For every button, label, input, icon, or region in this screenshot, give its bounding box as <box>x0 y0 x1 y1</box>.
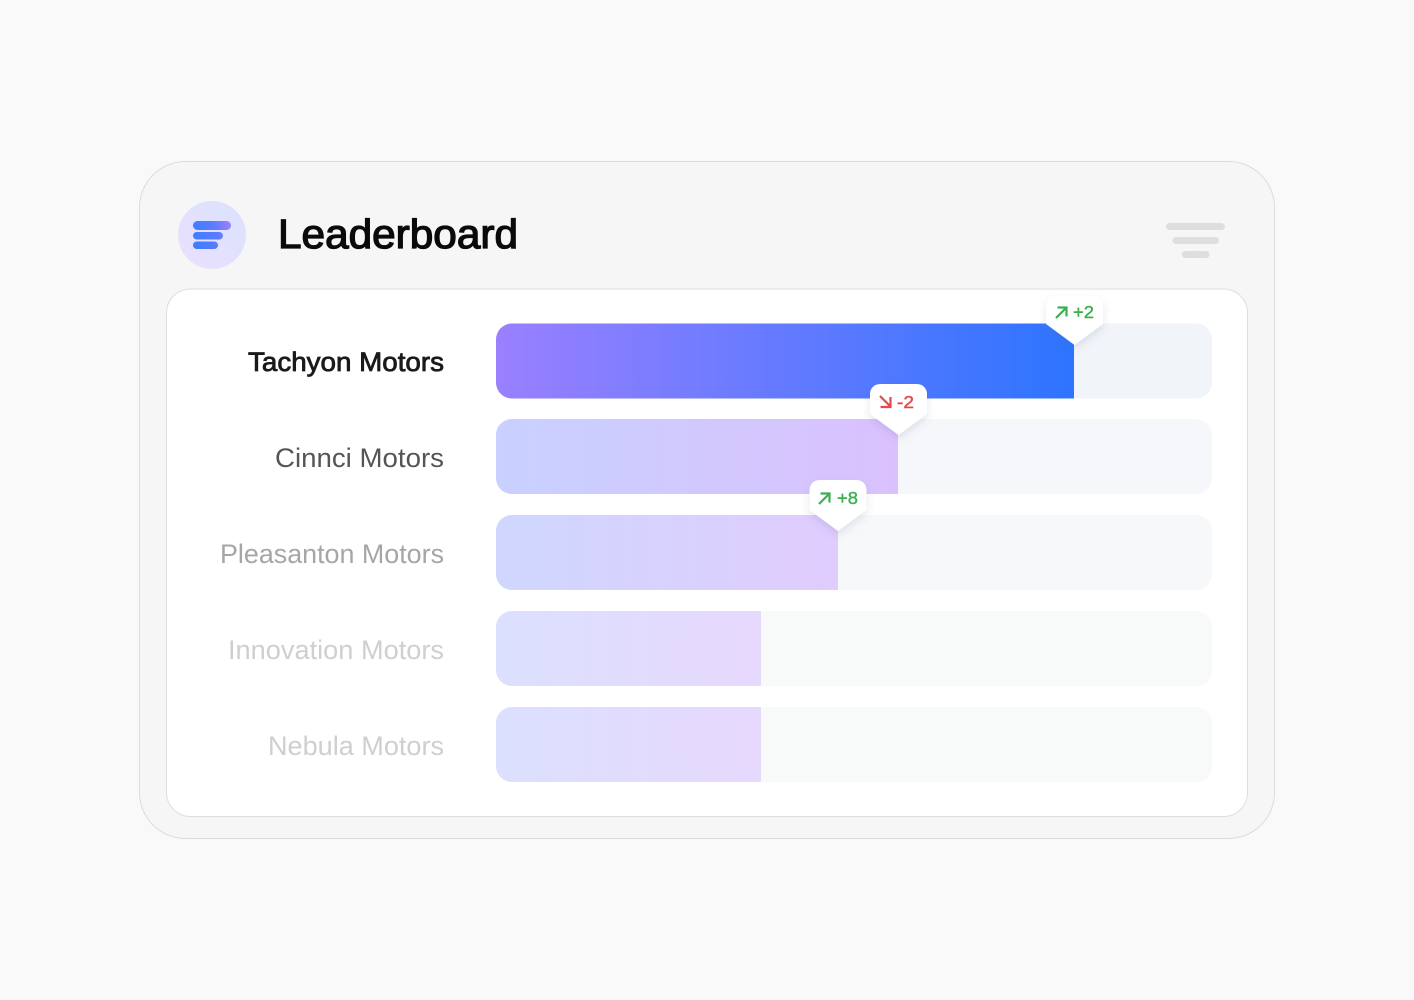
row label: Pleasanton Motors: Pleasanton Motors <box>220 539 444 569</box>
bar: Nebula Motors <box>496 707 1212 782</box>
callout: +2: +2 <box>1073 302 1094 322</box>
callout: +8: +8 <box>837 488 858 508</box>
bar: Tachyon Motors <box>496 324 1212 398</box>
icon: filter <box>1166 223 1225 258</box>
row label: Tachyon Motors: Tachyon Motors <box>248 347 444 377</box>
panel: leaderboard rows <box>166 289 1248 816</box>
icon: leaderboard badge <box>178 201 246 269</box>
callout: -2 <box>870 384 927 435</box>
callout: -2: -2 <box>897 392 914 412</box>
bar: Innovation Motors <box>496 611 1212 686</box>
callout: +8 <box>810 480 866 531</box>
bar: Cinnci Motors <box>496 419 1212 494</box>
row label: Innovation Motors: Innovation Motors <box>228 635 444 665</box>
outer card panel <box>140 162 1274 838</box>
row label: Nebula Motors: Nebula Motors <box>268 731 444 761</box>
callout: +2 <box>1046 296 1103 345</box>
bar: Pleasanton Motors <box>496 515 1212 590</box>
title: Leaderboard <box>278 211 518 257</box>
row label: Cinnci Motors: Cinnci Motors <box>275 443 444 473</box>
